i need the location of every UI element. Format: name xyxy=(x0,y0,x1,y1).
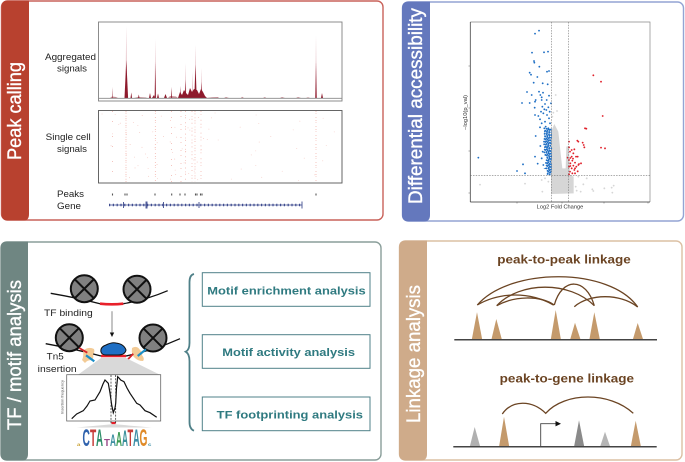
zoom wedge xyxy=(78,358,160,375)
box: TF footprinting analysis: TF footprinting analysis xyxy=(217,409,363,421)
motif logo: A xyxy=(116,429,122,451)
zoom wedge: motif xyxy=(77,424,152,428)
panel: linkage analysis xyxy=(399,240,682,460)
tab: differential accessibility xyxy=(402,2,430,222)
points: upregulated xyxy=(568,75,605,174)
gene model xyxy=(109,202,302,208)
axis label: x: Log2 Fold Change xyxy=(537,204,583,210)
diagram: TF bound chromatin with Tn5 xyxy=(46,324,180,363)
motif logo: C xyxy=(82,424,90,451)
label: Tn5 insertion xyxy=(38,351,77,375)
tab: linkage analysis: Linkage analysis xyxy=(404,285,425,423)
label: single cell signals: signals xyxy=(57,144,87,154)
label: single cell signals xyxy=(46,132,91,154)
axis label: y: −log10(p_val) xyxy=(463,95,469,130)
icon: Tn5 right xyxy=(128,347,146,361)
motif logo: A xyxy=(133,425,140,451)
label: Tn5 insertion: insertion xyxy=(38,364,77,375)
box: motif enrichment analysis xyxy=(202,273,370,306)
icon: Tn5 left xyxy=(79,348,94,363)
label: single cell signals: Single cell xyxy=(46,132,91,142)
label: aggregated signals: signals xyxy=(57,64,87,74)
motif logo: T xyxy=(128,425,133,451)
heading: peak-to-peak linkage: peak-to-peak linkage xyxy=(497,252,631,266)
label: peaks and gene: Peaks xyxy=(57,189,84,199)
diagram: peak-to-gene xyxy=(453,397,657,447)
chart: single cell signal track xyxy=(98,110,342,183)
tab: TF / motif analysis xyxy=(0,242,28,460)
heading: peak-to-gene linkage: peak-to-gene linkage xyxy=(500,372,634,386)
motif logo: A xyxy=(96,424,103,451)
motif logo xyxy=(77,424,151,451)
label: aggregated signals xyxy=(45,52,96,74)
tab: peak calling xyxy=(2,0,29,220)
chart: aggregated signal track xyxy=(98,22,342,101)
points: downregulated xyxy=(478,31,551,175)
icon: transcription factor xyxy=(101,343,126,355)
label: TF binding: TF binding xyxy=(44,308,93,319)
label: Tn5 insertion: Tn5 xyxy=(47,351,64,362)
arrow: binding step xyxy=(110,311,114,337)
label: aggregated signals: Aggregated xyxy=(45,52,96,62)
motif logo: c xyxy=(148,443,151,448)
tab: differential accessibility: Differential accessibility xyxy=(406,8,427,204)
arrow: transcription start site xyxy=(541,421,561,447)
motif logo: A xyxy=(122,426,128,451)
chart: footprint xyxy=(60,375,161,424)
brace xyxy=(186,274,194,431)
box: motif activity analysis xyxy=(202,335,370,368)
motif logo: T xyxy=(104,438,111,449)
diagram: open chromatin before binding xyxy=(51,275,168,304)
motif logo: G xyxy=(140,424,147,451)
motif logo: A xyxy=(110,431,116,450)
diagram: peak-to-peak xyxy=(454,277,657,340)
panel: TF / motif analysis xyxy=(0,242,381,460)
motif logo: T xyxy=(90,424,97,451)
box: motif enrichment analysis: Motif enrichment analysis xyxy=(207,285,366,297)
panel: peak calling xyxy=(2,0,383,220)
box: TF footprinting analysis xyxy=(202,397,370,431)
tab: TF / motif analysis: TF / motif analysis xyxy=(5,280,26,430)
motif logo: a xyxy=(77,443,80,448)
peak marks xyxy=(112,194,316,196)
chart: volcano plot xyxy=(463,22,650,210)
box: motif activity analysis: Motif activity analysis xyxy=(222,347,355,359)
label: peaks and gene: Gene xyxy=(57,201,81,211)
points: non-significant xyxy=(480,82,614,194)
label: peaks and gene xyxy=(57,189,84,211)
chart: footprint: Insertion frequency xyxy=(60,380,64,414)
tab: linkage analysis xyxy=(399,240,427,460)
tab: peak calling: Peak calling xyxy=(5,62,26,160)
panel: differential accessibility xyxy=(402,2,684,222)
